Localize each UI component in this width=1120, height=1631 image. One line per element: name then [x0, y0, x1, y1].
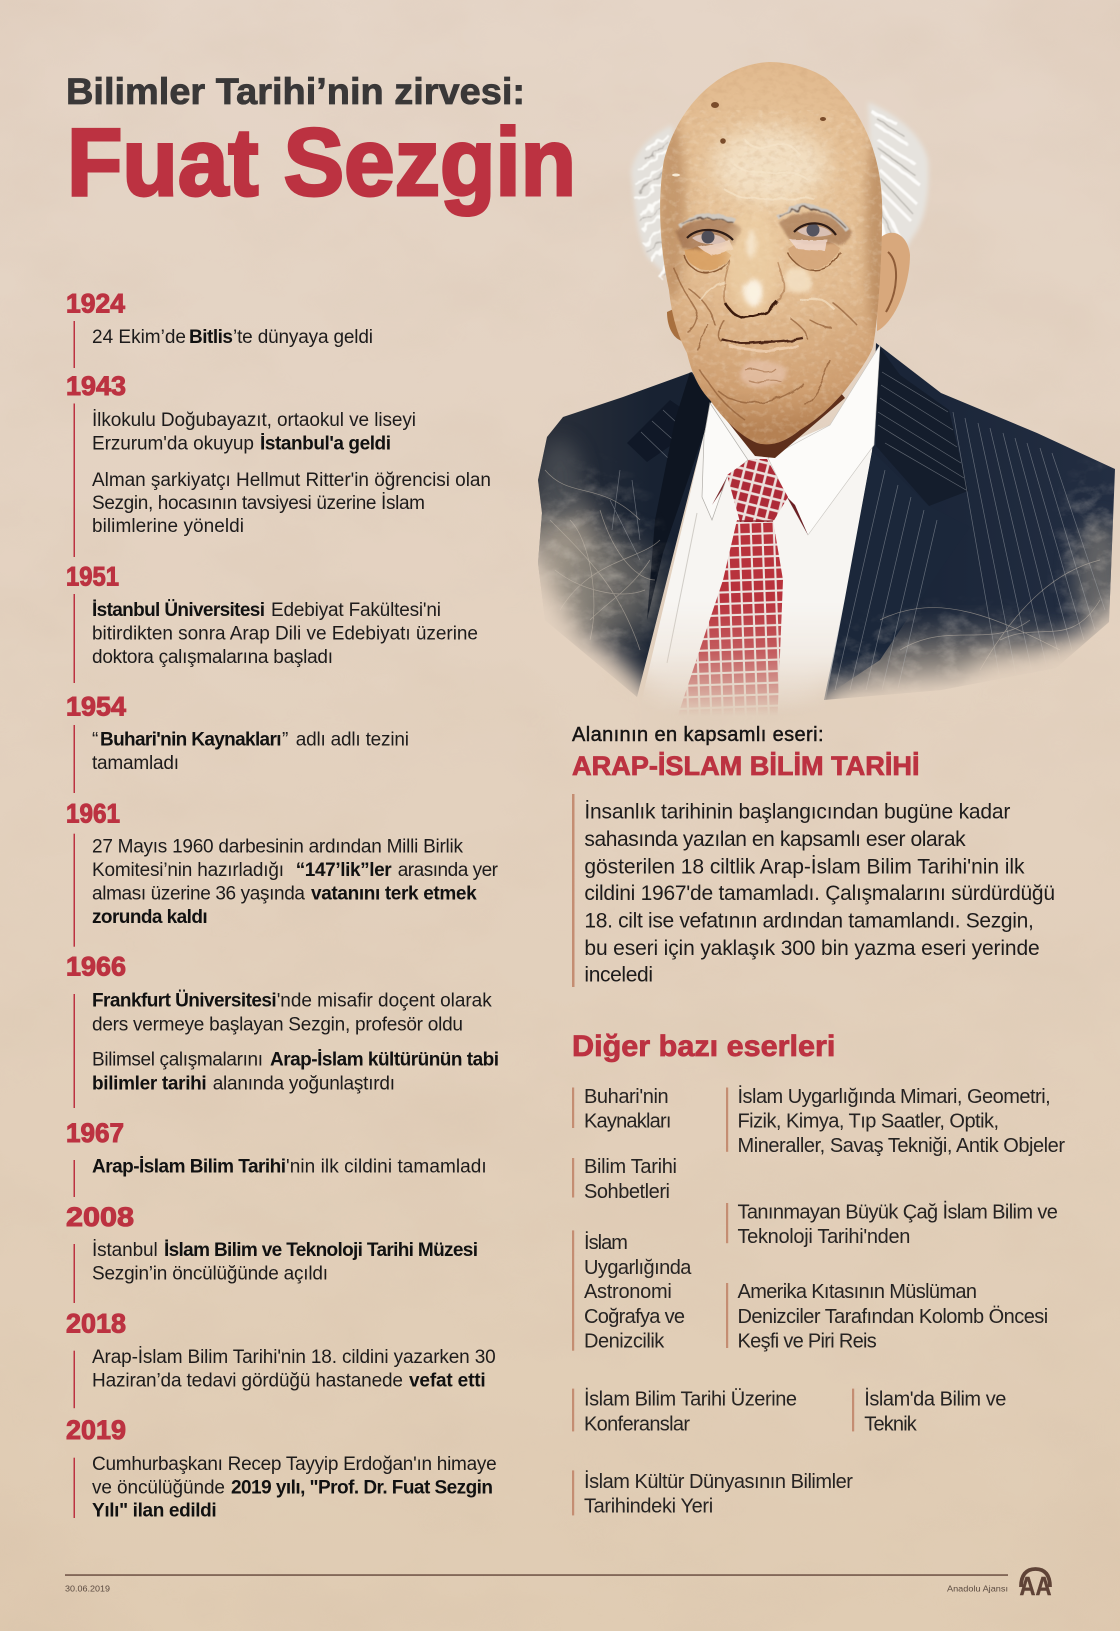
timeline entry: 2019: Yılı" ilan edildi — [92, 1501, 217, 1522]
timeline entry: 1954: adlı adlı tezini — [296, 730, 409, 751]
timeline entry: 2008: İslam Bilim ve Teknoloji Tarihi Müzesi — [164, 1240, 478, 1261]
heading: Diğer bazı eserleri: Diğer bazı eserleri — [572, 1030, 835, 1063]
timeline entry: 2019: 2019 yılı, "Prof. Dr. Fuat Sezgin — [231, 1477, 493, 1498]
work: Bilim Tarihi Sohbetleri: Bilim Tarihi — [584, 1156, 677, 1178]
timeline entry: 2008: 2008 — [66, 1202, 134, 1232]
eyebrows — [680, 207, 847, 230]
description block — [572, 794, 1055, 987]
work: İslam Bilim Tarihi Üzerine Konferanslar: İslam Bilim Tarihi Üzerine — [584, 1388, 797, 1411]
timeline entry: 1967: 1967 — [66, 1118, 124, 1148]
smoke wash over suit — [542, 464, 1114, 684]
work: Buhari'nin Kaynakları: Kaynakları — [584, 1110, 671, 1132]
work: İslam Uygarlığında Mimari: Mineraller, Savaş Tekniği, Antik Objeler — [738, 1135, 1065, 1157]
description block: bu eseri için yaklaşık 300 bin yazma eseri yerinde — [584, 937, 1040, 960]
work: İslam Uygarlığında Astronomi Coğrafya ve Denizcilik — [572, 1230, 692, 1352]
work: İslam Uygarlığında Astronomi Coğrafya ve Denizcilik: Coğrafya ve — [584, 1306, 685, 1328]
work: İslam Bilim Tarihi Üzerine Konferanslar — [572, 1388, 797, 1435]
face wrinkles — [673, 267, 857, 420]
timeline entry: 1954: tamamladı — [92, 753, 179, 774]
timeline entry: 1951: Edebiyat Fakültesi'ni — [271, 600, 441, 621]
mouth — [722, 338, 803, 343]
work: Bilim Tarihi Sohbetleri: Sohbetleri — [584, 1181, 670, 1203]
timeline entry: 1943 — [66, 371, 491, 557]
timeline entry: 1966: bilimler tarihi — [92, 1073, 207, 1094]
smoke washes on sleeves — [523, 440, 1120, 695]
timeline entry: 1943: Erzurum'da okuyup — [92, 434, 254, 454]
ears — [667, 233, 910, 341]
timeline entry: 2019: Cumhurbaşkanı Recep Tayyip Erdoğan'ın himaye — [92, 1454, 497, 1475]
work: İslam Uygarlığında Mimari: İslam Uygarlığında Mimari, Geometri, — [738, 1085, 1051, 1108]
timeline entry: 1954: ” — [282, 730, 288, 751]
timeline entry: 1924 — [66, 288, 373, 368]
shirt — [637, 345, 880, 720]
agency name: Anadolu Ajansı — [947, 1584, 1008, 1594]
timeline entry: 1966: alanında yoğunlaştırdı — [213, 1073, 395, 1094]
suit jacket — [538, 343, 1115, 700]
timeline entry: 1951 — [66, 562, 478, 683]
forehead highlight — [712, 127, 828, 203]
work: Amerika Kıtasının Müslüman: Keşfi ve Piri Reis — [738, 1330, 877, 1352]
timeline entry: 2019: 2019 — [66, 1415, 126, 1445]
work: İslam Uygarlığında Astronomi Coğrafya ve Denizcilik: İslam — [584, 1231, 628, 1254]
timeline entry: 1951: bitirdikten sonra Arap Dili ve Edebiyatı üzerine — [92, 624, 478, 644]
timeline entry: 1943: 1943 — [66, 371, 126, 401]
timeline entry: 1961: “147’lik”ler — [296, 860, 392, 881]
timeline entry: 1966: Frankfurt Üniversitesi — [92, 990, 277, 1012]
timeline entry: 1966: Arap-İslam kültürünün tabi — [270, 1050, 499, 1071]
description block: sahasında yazılan en kapsamlı eser olarak — [584, 828, 966, 851]
timeline entry: 1951: 1951 — [66, 562, 119, 592]
timeline entry: 1924: ’te dünyaya geldi — [233, 327, 373, 348]
timeline entry: 1943: İlkokulu Doğubayazıt, ortaokul ve liseyi — [92, 410, 416, 431]
work: Tanınmayan Büyük Çağ: Teknoloji Tarihi'nden — [738, 1226, 910, 1248]
painterly texture — [694, 90, 856, 251]
timeline entry: 2018: Arap-İslam Bilim Tarihi'nin 18. cildini yazarken 30 — [92, 1347, 496, 1368]
other works section — [572, 1030, 1065, 1518]
description block: cildini 1967'de tamamladı. Çalışmalarını sürdürdüğü — [584, 882, 1055, 905]
timeline entry: 2008: İstanbul — [92, 1240, 158, 1261]
timeline entry: 1924: Bitlis — [189, 327, 233, 348]
work: Tanınmayan Büyük Çağ: Tanınmayan Büyük Çağ İslam Bilim ve — [738, 1201, 1058, 1224]
timeline entry: 1943: Sezgin, hocasının tavsiyesi üzerine İslam — [92, 493, 425, 514]
timeline entry: 1966: 'nde misafir doçent olarak — [277, 990, 492, 1012]
timeline entry: 2018: vefat etti — [409, 1371, 486, 1392]
timeline entry: 1961: Komitesi’nin hazırladığı — [92, 860, 284, 881]
timeline entry: 1961: arasında yer — [398, 860, 499, 881]
subtitle line: Bilimler Tarihi’nin zirvesi: — [66, 70, 525, 112]
hair right — [868, 102, 928, 268]
timeline entry: 1954: “ — [92, 730, 98, 751]
footer — [65, 1569, 1052, 1601]
work: İslam Kültür Dünyasının: Tarihindeki Yeri — [584, 1496, 713, 1518]
date: 30.06.2019 — [65, 1584, 110, 1594]
description block: gösterilen 18 ciltlik Arap-İslam Bilim Tarihi'nin ilk — [584, 855, 1025, 878]
work: Amerika Kıtasının Müslüman: Denizciler Tarafından Kolomb Öncesi — [738, 1306, 1048, 1328]
timeline entry: 2018: 2018 — [66, 1309, 126, 1339]
work: Buhari'nin Kaynakları: Buhari'nin — [584, 1086, 669, 1108]
kicker: Alanının en kapsamlı eseri: — [572, 724, 824, 746]
timeline entry: 1967: Arap-İslam Bilim Tarihi — [92, 1157, 286, 1178]
under-eye bags — [684, 247, 732, 270]
work: Tanınmayan Büyük Çağ — [726, 1201, 1058, 1248]
timeline entry: 1961: alması üzerine 36 yaşında — [92, 884, 305, 905]
work: Bilim Tarihi Sohbetleri — [572, 1156, 677, 1203]
inner shadow by shirt — [647, 372, 712, 620]
main work section — [572, 724, 1055, 987]
timeline entry: 1961 — [66, 799, 499, 947]
timeline entry: 2008 — [66, 1202, 478, 1303]
title — [66, 70, 576, 216]
work: İslam Kültür Dünyasının: İslam Kültür Dünyasının Bilimler — [584, 1470, 853, 1493]
timeline entry: 1966 — [66, 952, 499, 1108]
neck shadow — [712, 380, 845, 458]
skin side shading — [658, 120, 686, 300]
work: İslam'da Bilim ve Teknik: İslam'da Bilim ve — [864, 1388, 1006, 1411]
tie — [680, 459, 808, 712]
work: İslam Uygarlığında Mimari — [726, 1085, 1065, 1157]
timeline entry: 1954 — [66, 692, 409, 793]
work: İslam Kültür Dünyasının — [572, 1470, 853, 1518]
work: İslam Bilim Tarihi Üzerine Konferanslar: Konferanslar — [584, 1413, 690, 1435]
right lapel — [876, 345, 968, 506]
timeline entry: 1924: 1924 — [66, 288, 125, 318]
description block: İnsanlık tarihinin başlangıcından bugüne kadar — [584, 800, 1010, 823]
portrait of Fuat Sezgin — [500, 60, 1120, 730]
description block: inceledi — [584, 964, 653, 987]
main title: Fuat Sezgin: Fuat Sezgin — [67, 109, 576, 216]
timeline entry: 2019: ve öncülüğünde — [92, 1477, 225, 1498]
timeline entry: 1967: 'nin ilk cildini tamamladı — [286, 1157, 487, 1178]
timeline entry: 1966: Bilimsel çalışmalarını — [92, 1050, 263, 1071]
description block: 18. cilt ise vefatının ardından tamamlandı. Sezgin, — [584, 910, 1034, 933]
timeline entry: 1951: İstanbul Üniversitesi — [92, 600, 265, 621]
breast pocket — [628, 400, 679, 462]
eye sockets — [676, 219, 742, 250]
timeline entry: 1943: İstanbul'a geldi — [260, 434, 391, 454]
timeline entry: 1951: doktora çalışmalarına başladı — [92, 647, 333, 668]
moles — [672, 102, 826, 176]
work: Buhari'nin Kaynakları — [572, 1086, 671, 1132]
timeline entry: 2018 — [66, 1309, 496, 1408]
work: İslam Uygarlığında Mimari: Fizik, Kimya, Tıp Saatler, Optik, — [738, 1110, 999, 1132]
hair left — [631, 125, 685, 280]
timeline entry: 1943: Alman şarkiyatçı Hellmut Ritter'in öğrencisi olan — [92, 470, 491, 491]
work: İslam'da Bilim ve Teknik: Teknik — [864, 1413, 918, 1435]
timeline entry: 1967 — [66, 1118, 487, 1197]
chin — [739, 360, 787, 388]
smoke strands — [545, 470, 1100, 670]
collar right — [768, 345, 880, 535]
work: Amerika Kıtasının Müslüman: Amerika Kıtasının Müslüman — [738, 1281, 977, 1303]
timeline entry: 1954: Buhari'nin Kaynakları — [100, 730, 282, 751]
shirt and tie with bottom fade — [637, 345, 880, 730]
timeline entry: 1924: 24 Ekim’de — [92, 327, 186, 348]
timeline entry: 1961: 1961 — [66, 799, 120, 829]
timeline entry: 2018: Haziran’da tedavi gördüğü hastanede — [92, 1371, 403, 1392]
work: Amerika Kıtasının Müslüman — [726, 1281, 1048, 1352]
timeline — [66, 288, 499, 1522]
heading: ARAP-İSLAM BİLİM TARİHİ: ARAP-İSLAM BİLİM TARİHİ — [572, 751, 920, 781]
timeline entry: 1943: bilimlerine yöneldi — [92, 516, 244, 537]
work: İslam'da Bilim ve Teknik — [852, 1388, 1006, 1435]
nose — [726, 213, 778, 317]
icon: Anadolu Agency logo: AA — [1020, 1571, 1052, 1601]
collar left — [702, 403, 748, 520]
work: İslam Uygarlığında Astronomi Coğrafya ve Denizcilik: Astronomi — [584, 1281, 672, 1303]
timeline entry: 1961: zorunda kaldı — [92, 907, 208, 928]
eyes — [687, 223, 836, 244]
timeline entry: 1961: vatanını terk etmek — [311, 884, 477, 905]
timeline entry: 1966: ders vermeye başlayan Sezgin, profesör oldu — [92, 1015, 463, 1036]
timeline entry: 1954: 1954 — [66, 692, 126, 722]
timeline entry: 1961: 27 Mayıs 1960 darbesinin ardından Milli Birlik — [92, 836, 464, 858]
head and face — [660, 62, 882, 444]
work: İslam Uygarlığında Astronomi Coğrafya ve Denizcilik: Denizcilik — [584, 1330, 665, 1352]
timeline entry: 1966: 1966 — [66, 952, 126, 982]
lower lids pink — [698, 240, 734, 256]
timeline entry: 2019 — [66, 1415, 497, 1522]
timeline entry: 2008: Sezgin’in öncülüğünde açıldı — [92, 1264, 328, 1284]
work: İslam Uygarlığında Astronomi Coğrafya ve Denizcilik: Uygarlığında — [584, 1257, 692, 1279]
